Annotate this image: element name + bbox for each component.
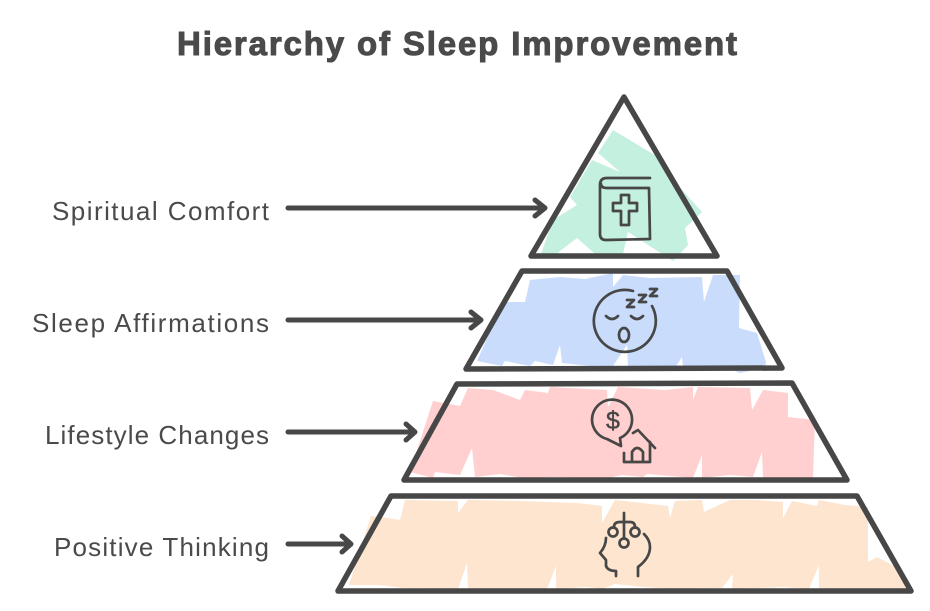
arrow: positive thinking (288, 536, 351, 552)
arrow: spiritual comfort (288, 200, 545, 216)
pyramid tier: peach fill (349, 500, 909, 590)
panel: sleep affirmations row (32, 271, 782, 373)
panel: spiritual comfort row (52, 97, 717, 261)
icon: head with scales (600, 513, 650, 576)
pyramid tier: pink fill (410, 387, 815, 478)
icon: bible (600, 178, 650, 240)
pyramid tier: blue outline (466, 271, 782, 369)
panel: lifestyle changes row (45, 383, 847, 480)
title: Hierarchy of Sleep Improvement (177, 25, 737, 62)
pyramid tier: peach outline (338, 496, 911, 591)
pyramid tier: triangle outline (531, 97, 717, 256)
label: Positive Thinking: Positive Thinking (54, 532, 269, 562)
panel: positive thinking row (54, 496, 911, 591)
icon: sleeping face (594, 289, 657, 352)
arrow: lifestyle changes (288, 424, 415, 440)
label: Lifestyle Changes: Lifestyle Changes (45, 420, 269, 450)
pyramid tier: blue fill (477, 273, 766, 373)
pyramid tier: green fill (541, 130, 702, 261)
label: Sleep Affirmations: Sleep Affirmations (32, 308, 269, 338)
pyramid tier: pink outline (404, 383, 847, 480)
icon: money and house: $ (606, 407, 620, 435)
arrow: sleep affirmations (288, 312, 481, 328)
icon: money and house (592, 400, 655, 462)
label: Spiritual Comfort: Spiritual Comfort (52, 196, 270, 226)
